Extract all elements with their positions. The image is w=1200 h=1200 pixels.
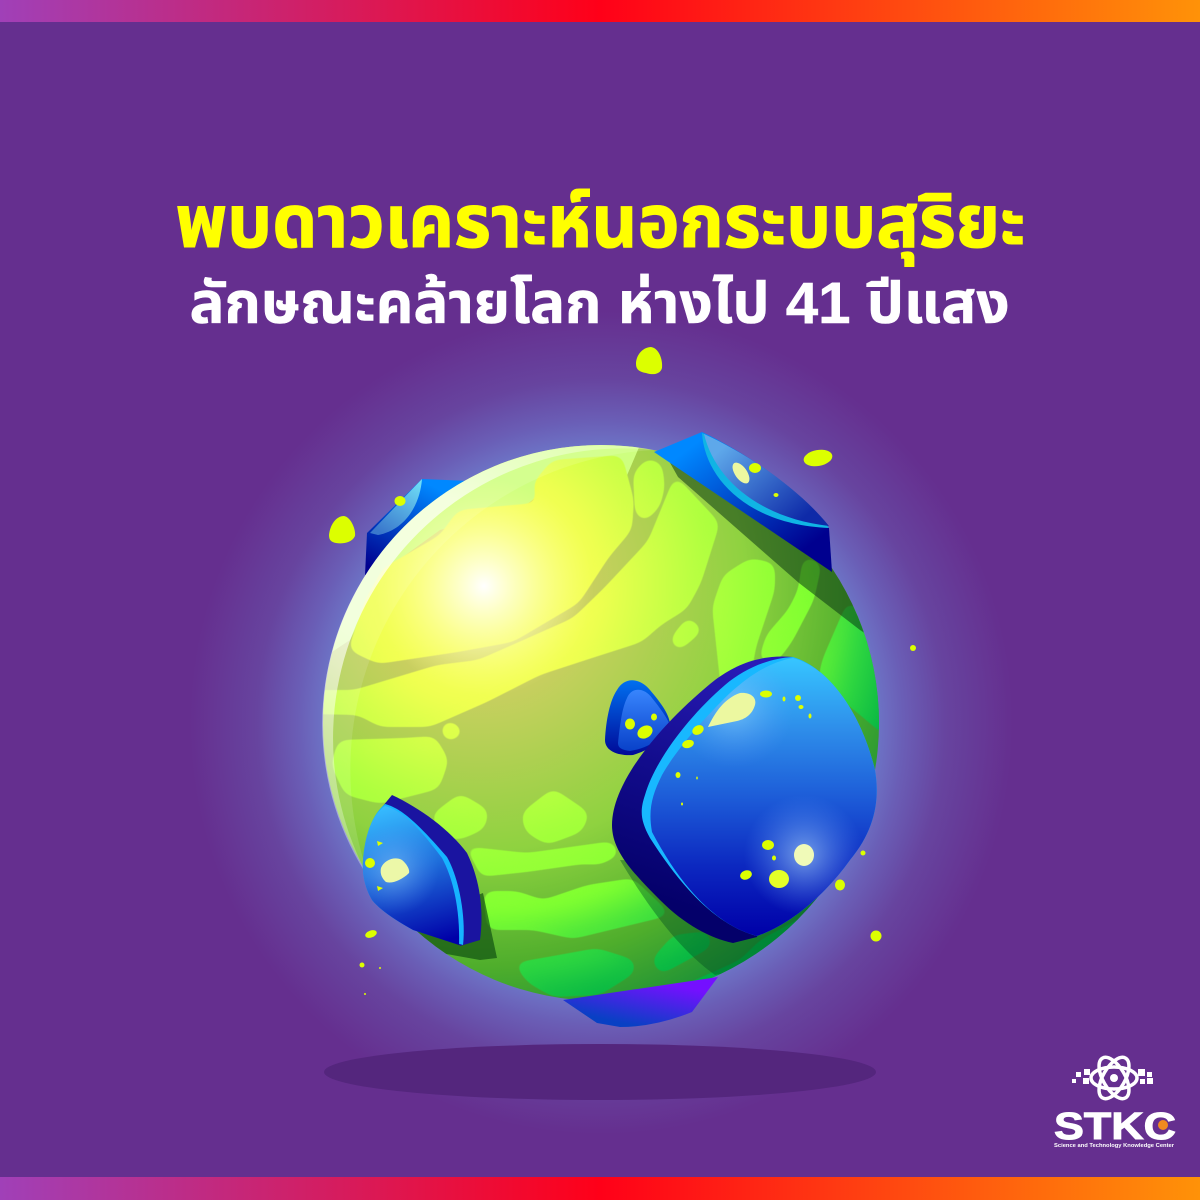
- logo pixel squares: [1072, 1069, 1153, 1084]
- shard: bottom: [563, 977, 718, 1027]
- ground shadow: [324, 1044, 876, 1100]
- shard: top left: [365, 479, 470, 575]
- subtitle: ลักษณะคล้ายโลก ห่างไป 41 ปีแสง: [190, 271, 1010, 336]
- pale upper cap: [332, 445, 639, 652]
- shard: small: [605, 680, 670, 755]
- top gradient bar: [0, 0, 1200, 22]
- planet glow: [181, 303, 1021, 1143]
- logo orange dot: [1158, 1120, 1168, 1130]
- logo tagline: Science and Technology Knowledge Center: [1054, 1143, 1175, 1149]
- shard: left: [363, 795, 481, 946]
- terrain bands: [310, 455, 890, 1010]
- planet: [310, 440, 890, 1010]
- planet base sphere: [320, 440, 885, 1005]
- logo: STKC: [1054, 1053, 1176, 1149]
- shadow of top-right shard: [670, 462, 864, 632]
- shard: top right: [654, 432, 832, 572]
- logo atom icon: [1091, 1053, 1137, 1103]
- specular highlight: [390, 496, 580, 682]
- logo wordmark: STKC: [1054, 1106, 1176, 1148]
- title: พบดาวเคราะห์นอกระบบสุริยะ: [176, 180, 1026, 267]
- shadow of main shard: [620, 860, 818, 975]
- floating particles: [329, 347, 916, 995]
- shadow of left shard: [416, 893, 497, 960]
- planet glass rim: [322, 445, 654, 880]
- shard: main: [612, 657, 877, 943]
- bottom gradient bar: [0, 1177, 1200, 1200]
